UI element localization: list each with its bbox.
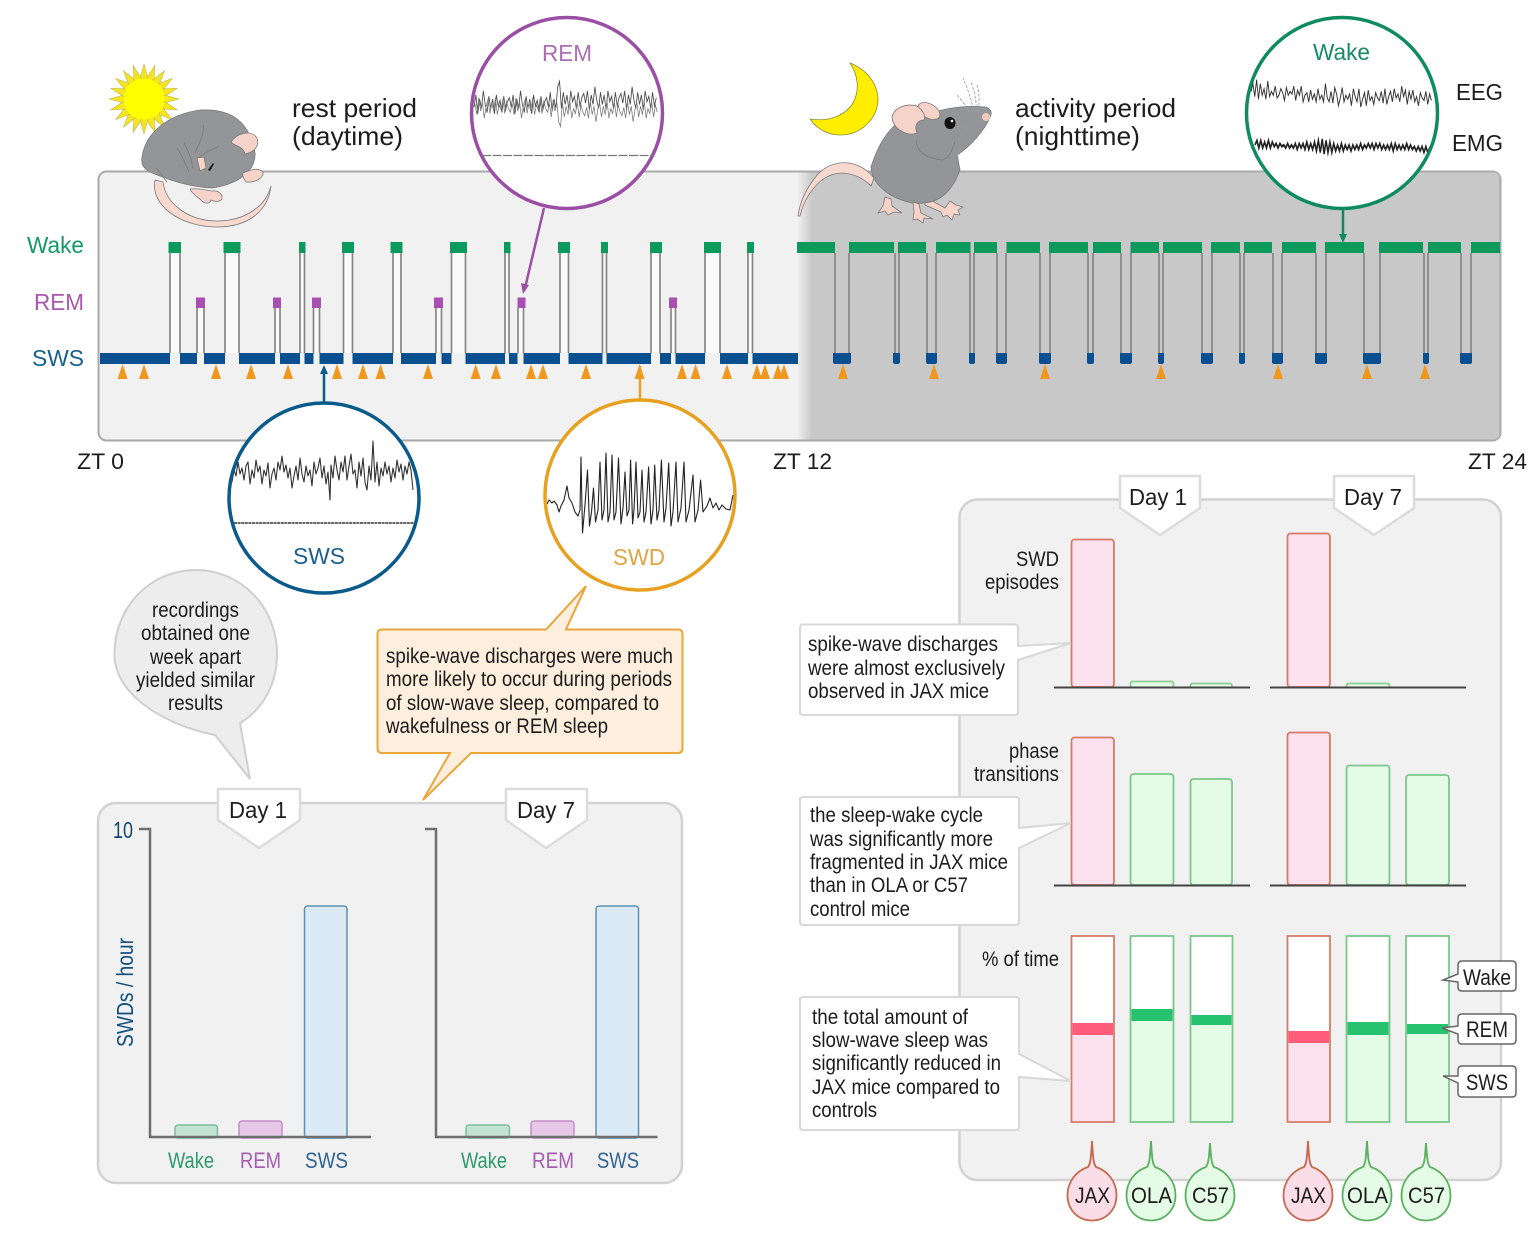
row label: phase transitions: transitions (974, 763, 1059, 786)
callout text (136, 599, 255, 715)
strain: OLA day 1 (1126, 1141, 1176, 1220)
REM EMG trace (482, 154, 654, 156)
callout: SWS recording (229, 365, 419, 593)
bar chart: day 7 (425, 829, 658, 1173)
callout text: significantly reduced in (812, 1052, 1001, 1075)
legend tag: SWS (1443, 1066, 1516, 1097)
legend tag: SWS: SWS (1466, 1070, 1508, 1095)
row label: phase transitions: phase (1009, 740, 1059, 763)
callout text: control mice (810, 898, 910, 921)
C57 day 7 (1406, 936, 1449, 1122)
channel label: EEG: EEG (1456, 79, 1503, 105)
heading: rest period (292, 93, 417, 151)
callout text: more likely to occur during periods (386, 668, 672, 691)
tag: Day 1: Day 1 (1129, 484, 1187, 510)
bar chart: day 7: SWS (597, 1148, 639, 1173)
callout: spike-wave discharges more likely during SWS (378, 586, 682, 800)
left front foot (878, 197, 902, 215)
y axis label: SWDs / hour (112, 938, 138, 1047)
tail (798, 163, 874, 216)
callout text: than in OLA or C57 (810, 874, 968, 897)
time axis labels: ZT 0 (77, 449, 124, 474)
Wake EEG trace (1251, 80, 1431, 107)
legend tag: Wake (1443, 961, 1516, 991)
icon: awake mouse (798, 78, 991, 223)
bar chart: phase transitions (1054, 732, 1466, 886)
legend tag: REM (1442, 1014, 1516, 1044)
tag: Day 1 (218, 789, 300, 848)
panel: 24-hour hypnogram (27, 172, 1500, 440)
callout: Wake recording (1246, 18, 1438, 243)
tag: Day 7: Day 7 (517, 797, 575, 823)
callout: recordings one week apart (114, 570, 277, 779)
callout: REM recording (472, 18, 662, 294)
y axis label (112, 817, 138, 1047)
strain: JAX day 1: JAX (1075, 1183, 1110, 1208)
row label: SWD episodes: SWD (1016, 548, 1059, 571)
tag: Day 1: Day 1 (229, 797, 287, 823)
bar chart: day 1: REM (240, 1148, 281, 1173)
callout text: recordings (152, 599, 239, 622)
JAX day 7 (1288, 936, 1330, 1122)
time axis labels (77, 449, 1527, 474)
back leg and foot (925, 197, 963, 220)
callout: sleep-wake cycle fragmented (800, 797, 1071, 925)
OLA day 1 (1130, 936, 1174, 1122)
callout text: spike-wave discharges (808, 633, 998, 656)
callout text: were almost exclusively (807, 657, 1005, 680)
callout text: observed in JAX mice (808, 680, 989, 703)
bar chart: day 7: REM (532, 1148, 574, 1173)
small ear (915, 99, 943, 123)
callout text: fragmented in JAX mice (810, 851, 1008, 874)
channel label: EMG: EMG (1452, 130, 1503, 156)
hypnogram transition lines (170, 253, 1471, 355)
body (142, 110, 255, 188)
callout text: wakefulness or REM sleep (385, 715, 608, 738)
SWS EMG trace (234, 522, 414, 524)
strain: C57 day 7: C57 (1408, 1183, 1445, 1208)
callout text: yielded similar (136, 669, 255, 692)
icon: moon (810, 63, 878, 135)
large ear (892, 105, 925, 134)
callout text: spike-wave discharges were much (386, 645, 673, 668)
hind foot (243, 169, 263, 182)
inner details (156, 125, 219, 182)
strain: C57 day 1: C57 (1192, 1183, 1229, 1208)
strain: JAX day 1 (1068, 1141, 1116, 1220)
SWD event markers (118, 364, 1430, 379)
line to SWD marker (639, 366, 641, 400)
SWD EEG trace with spikes (547, 453, 733, 533)
callout text (807, 633, 1005, 703)
interior of daytime transitions (170, 253, 752, 353)
tag: Day 7 (506, 789, 587, 848)
right front foot (913, 202, 933, 223)
callout: SWD recording (545, 366, 735, 590)
tail (154, 180, 271, 227)
callout: SWD recording: SWD (613, 544, 665, 570)
row label: phase transitions (974, 740, 1059, 786)
OLA day 7 (1346, 936, 1390, 1122)
time axis labels: ZT 12 (773, 449, 832, 474)
strain labels (1068, 1141, 1450, 1220)
bar chart: day 1 (139, 829, 371, 1173)
body (871, 106, 991, 203)
strain: OLA day 7: OLA (1347, 1183, 1388, 1208)
state labels (27, 232, 84, 371)
callout text: controls (812, 1099, 877, 1122)
night-time shaded region (797, 172, 1500, 440)
row label: SWD episodes: episodes (985, 571, 1059, 594)
legend tag: REM: REM (1466, 1017, 1508, 1042)
strain: JAX day 7 (1284, 1141, 1332, 1220)
stacked bars: percent of time (1072, 936, 1449, 1122)
callout: spike-wave discharges exclusive to JAX (800, 624, 1071, 715)
row label: percent of time: % of time (982, 948, 1059, 971)
wake bouts (168, 242, 1500, 253)
callout text (385, 645, 673, 738)
head line (917, 140, 955, 160)
legend tag: Wake: Wake (1463, 965, 1511, 990)
panel: SWDs per hour bar charts (98, 789, 682, 1183)
tag: Day 7: Day 7 (1344, 484, 1402, 510)
row label: SWD episodes (985, 548, 1059, 594)
panel: strain comparison (960, 476, 1501, 1180)
state labels: SWS (32, 345, 84, 371)
bar chart: day 7: Wake (461, 1148, 507, 1173)
icon: sun (109, 64, 179, 134)
callout text: the total amount of (812, 1006, 968, 1029)
C57 day 1 (1190, 936, 1232, 1122)
callout: Wake recording: Wake (1313, 39, 1370, 65)
bar chart: day 1: Wake (168, 1148, 214, 1173)
callout text: week apart (149, 646, 241, 669)
arrow to wake bout (1339, 208, 1347, 243)
callout text: JAX mice compared to (812, 1076, 1000, 1099)
tag: Day 1 (1120, 476, 1200, 535)
callout: slow-wave sleep reduced (800, 997, 1071, 1130)
state labels: REM (34, 289, 84, 315)
callout: REM recording: REM (542, 40, 592, 66)
ear (231, 133, 258, 154)
callout text: obtained one (141, 622, 250, 645)
nose (982, 113, 990, 121)
strain: OLA day 1: OLA (1131, 1183, 1172, 1208)
callout text (812, 1006, 1001, 1122)
strain: JAX day 7: JAX (1291, 1183, 1326, 1208)
callout text: slow-wave sleep was (812, 1029, 988, 1052)
callout text (809, 804, 1008, 921)
bar chart: day 1: SWS (305, 1148, 348, 1173)
heading: activity period: (nighttime) (1015, 121, 1140, 151)
slow-wave sleep bouts (100, 353, 1472, 364)
strain: OLA day 7 (1342, 1141, 1392, 1220)
heading: activity period (1015, 93, 1176, 151)
y axis label: 10 (113, 817, 133, 843)
icon: sleeping mouse (142, 110, 271, 227)
callout text: was significantly more (809, 828, 993, 851)
state labels: Wake (27, 232, 84, 258)
REM EEG trace (474, 81, 657, 127)
bar chart: SWD episodes (1054, 534, 1466, 688)
callout text: of slow-wave sleep, compared to (386, 692, 659, 715)
heading: activity period: activity period (1015, 93, 1176, 123)
SWS EEG trace (232, 441, 413, 500)
heading: rest period: rest period (292, 93, 417, 123)
eye (944, 117, 956, 129)
callout text: results (168, 692, 223, 715)
callout: SWS recording: SWS (293, 543, 345, 569)
heading: rest period: (daytime) (292, 121, 403, 151)
tag: Day 7 (1334, 476, 1414, 535)
Wake EMG trace (1255, 139, 1434, 154)
arrow to REM bout (521, 208, 544, 294)
arrow to SWS bout (320, 365, 328, 403)
strain: C57 day 7 (1402, 1143, 1450, 1220)
JAX day 1 (1072, 936, 1114, 1122)
time axis labels: ZT 24 (1468, 449, 1527, 474)
whiskers (943, 78, 979, 144)
strain: C57 day 1 (1186, 1143, 1234, 1220)
front paws (190, 189, 222, 203)
callout text: the sleep-wake cycle (810, 804, 983, 827)
REM bouts (196, 298, 677, 308)
